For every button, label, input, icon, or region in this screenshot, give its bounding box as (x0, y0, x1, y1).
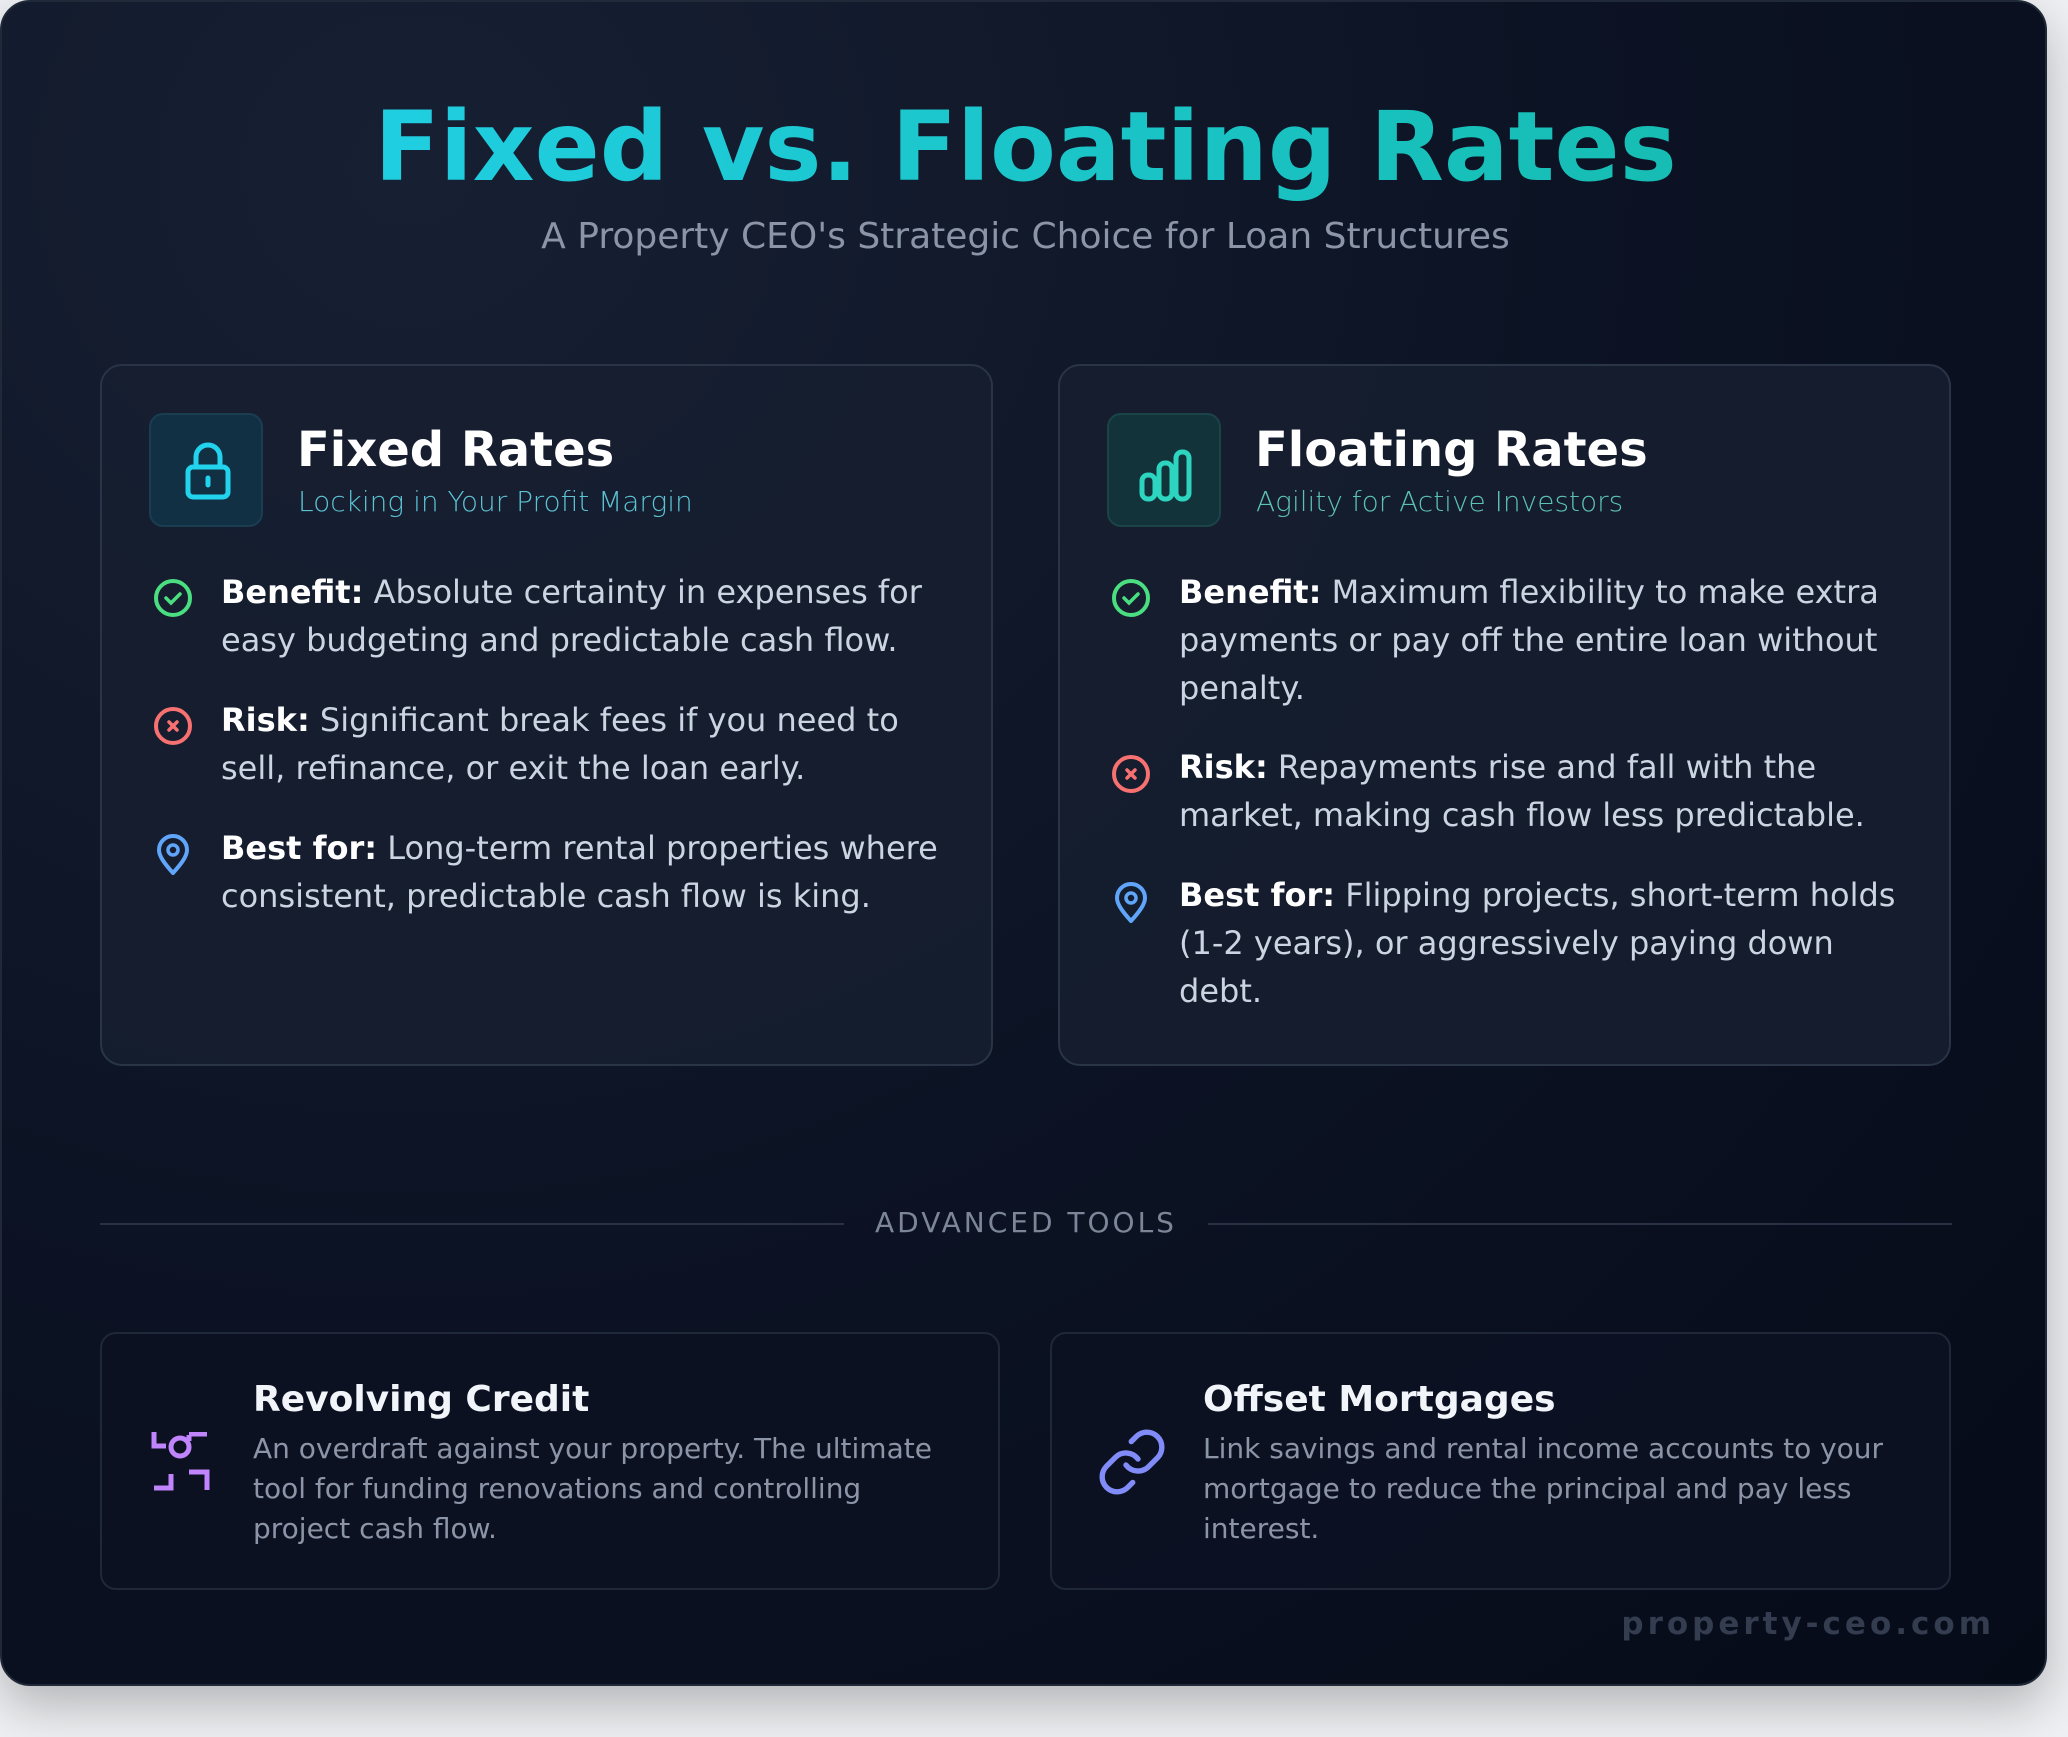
title (2, 87, 2049, 207)
subheading: fixed: Locking in Your Profit Margin (298, 485, 693, 518)
heading: offset mortgages: Offset Mortgages (1203, 1379, 1556, 1420)
title: Fixed vs. Floating Rates (374, 91, 1677, 203)
icon: x (1112, 755, 1150, 793)
icon: lock (149, 413, 263, 527)
icon: check (154, 579, 192, 617)
heading: fixed rates: Fixed Rates (297, 422, 614, 478)
subtitle: A Property CEO's Strategic Choice for Loan Structures (541, 216, 1510, 257)
text: offset desc: Link savings and rental income accounts to your mortgage to reduce the principal and pay less interest. (1203, 1432, 1883, 1545)
text: floating benefit: Benefit: Maximum flexibility to make extra payments or pay off the entire loan without penalty. (1179, 573, 1879, 707)
text: fixed risk: Risk: Significant break fees if you need to sell, refinance, or exit the loan early. (221, 701, 899, 787)
icon: pin (157, 834, 189, 875)
icon: link (1100, 1430, 1164, 1494)
text: fixed best for: Best for: Long-term rental properties where consistent, predictable cash flow is king. (221, 829, 938, 915)
footer: website: property-ceo.com (1621, 1606, 1995, 1642)
panel: floating rates (1058, 364, 1951, 1066)
heading: floating rates: Floating Rates (1255, 422, 1648, 478)
icon: x (154, 707, 192, 745)
panel: revolving credit (100, 1332, 1000, 1590)
icon: pin (1115, 882, 1147, 923)
panel: fixed rates (100, 364, 993, 1066)
text: revolving desc: An overdraft against your property. The ultimate tool for funding renovations and controlling project cash flow. (253, 1432, 932, 1545)
panel: offset mortgages (1050, 1332, 1951, 1590)
heading: revolving credit: Revolving Credit (253, 1379, 589, 1420)
text: fixed benefit: Benefit: Absolute certainty in expenses for easy budgeting and predictable cash flow. (221, 573, 922, 659)
icon: check (1112, 579, 1150, 617)
subheading: floating: Agility for Active Investors (1256, 485, 1623, 518)
icon: bar chart (1107, 413, 1221, 527)
text: floating best for: Best for: Flipping projects, short-term holds (1-2 years), or aggressively paying down debt. (1179, 876, 1895, 1010)
text: floating risk: Risk: Repayments rise and fall with the market, making cash flow less predictable. (1179, 748, 1865, 834)
section heading: advanced tools: ADVANCED TOOLS (875, 1206, 1177, 1239)
icon: revolving (152, 1432, 210, 1490)
